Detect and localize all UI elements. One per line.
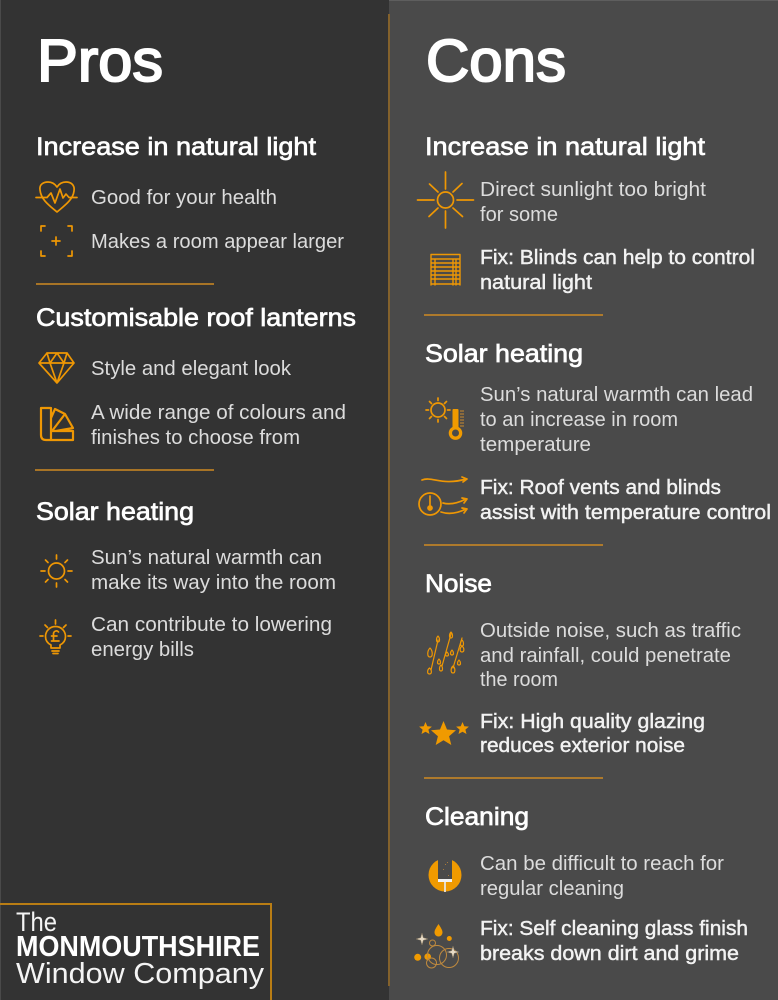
text: a wide range of colours and finishes: finishes to choose from [91,426,300,449]
text: sun's natural warmth [480,383,753,456]
text: sun's natural warmth: make its way into the room [91,571,336,594]
text: fix vents: Fix: Roof vents and blinds [480,476,721,499]
text: outside noise: the room [480,668,558,691]
text: fix glazing: Fix: High quality glazing [480,710,705,733]
text: fix glazing: reduces exterior noise [480,734,685,757]
icon: diamond [39,353,74,383]
text: direct sunlight: Direct sunlight too bright [480,178,706,201]
logo [0,904,271,1000]
text: fix vents: assist with temperature control [480,501,771,524]
text: a wide range of colours and finishes [91,401,346,449]
heading: increase in natural light: Increase in natural light [425,133,705,161]
text: can be difficult [480,852,724,900]
text: a wide range of colours and finishes: A wide range of colours and [91,401,346,424]
text: outside noise [480,619,741,691]
icon: window blinds [431,254,460,285]
text: direct sunlight [480,178,706,226]
text: can contribute to lowering energy bills [91,613,332,661]
icon: sun [41,555,72,587]
text: sun's natural warmth: temperature [480,433,591,456]
text: sun's natural warmth: Sun’s natural warmth can [91,546,322,569]
icon: bubbles and sparkles [414,924,459,968]
icon: three stars [419,721,469,745]
text: fix blinds: natural light [480,271,592,294]
text: can be difficult: regular cleaning [480,877,624,900]
logo: Window Company [16,958,265,990]
text: sun's natural warmth: to an increase in room [480,408,678,431]
text: outside noise: Outside noise, such as traffic [480,619,741,642]
text: fix self cleaning: Fix: Self cleaning glass finish [480,917,748,940]
heading: increase in natural light: Increase in natural light [36,133,316,161]
panel: cons [388,0,778,1000]
icon: thermometer with air flow [419,477,467,515]
logo: MONMOUTHSHIRE [16,931,260,963]
heading: solar heating: Solar heating [425,340,583,368]
heading: solar heating: Solar heating [36,498,194,526]
heading: customisable roof lanterns: Customisable roof lanterns [36,304,356,332]
text: makes a room appear larger: Makes a room appear larger [91,230,344,253]
text: fix self cleaning: breaks down dirt and grime [480,942,739,965]
heading: noise: Noise [425,570,492,598]
icon: sun and thermometer [426,398,464,440]
icon: expand frame [41,226,72,256]
title: Cons: Cons [426,28,566,94]
icon: rain [428,632,464,674]
text: fix blinds [480,246,755,294]
text: fix blinds: Fix: Blinds can help to control [480,246,755,269]
text: can contribute to lowering energy bills: Can contribute to lowering [91,613,332,636]
text: fix vents [480,476,771,524]
icon: bright sun [418,172,474,228]
logo: The [16,907,57,937]
icon: colour fan [41,408,73,440]
text: fix glazing [480,710,705,757]
text: outside noise: and rainfall, could penetrate [480,644,731,667]
icon: heart with pulse [36,182,77,212]
icon: pound light bulb [40,620,71,654]
text: fix self cleaning [480,917,748,965]
icon: window squeegee [428,857,462,892]
text: sun's natural warmth [91,546,336,594]
text: can contribute to lowering energy bills: energy bills [91,638,194,661]
text: good for your health: Good for your health [91,186,277,209]
text: direct sunlight: for some [480,203,558,226]
heading: cleaning: Cleaning [425,803,529,831]
title: Pros: Pros [37,28,163,94]
panel: pros [0,0,389,1000]
text: style and elegant look: Style and elegant look [91,357,292,380]
text: can be difficult: Can be difficult to reach for [480,852,724,875]
text: sun's natural warmth: Sun’s natural warmth can lead [480,383,753,406]
